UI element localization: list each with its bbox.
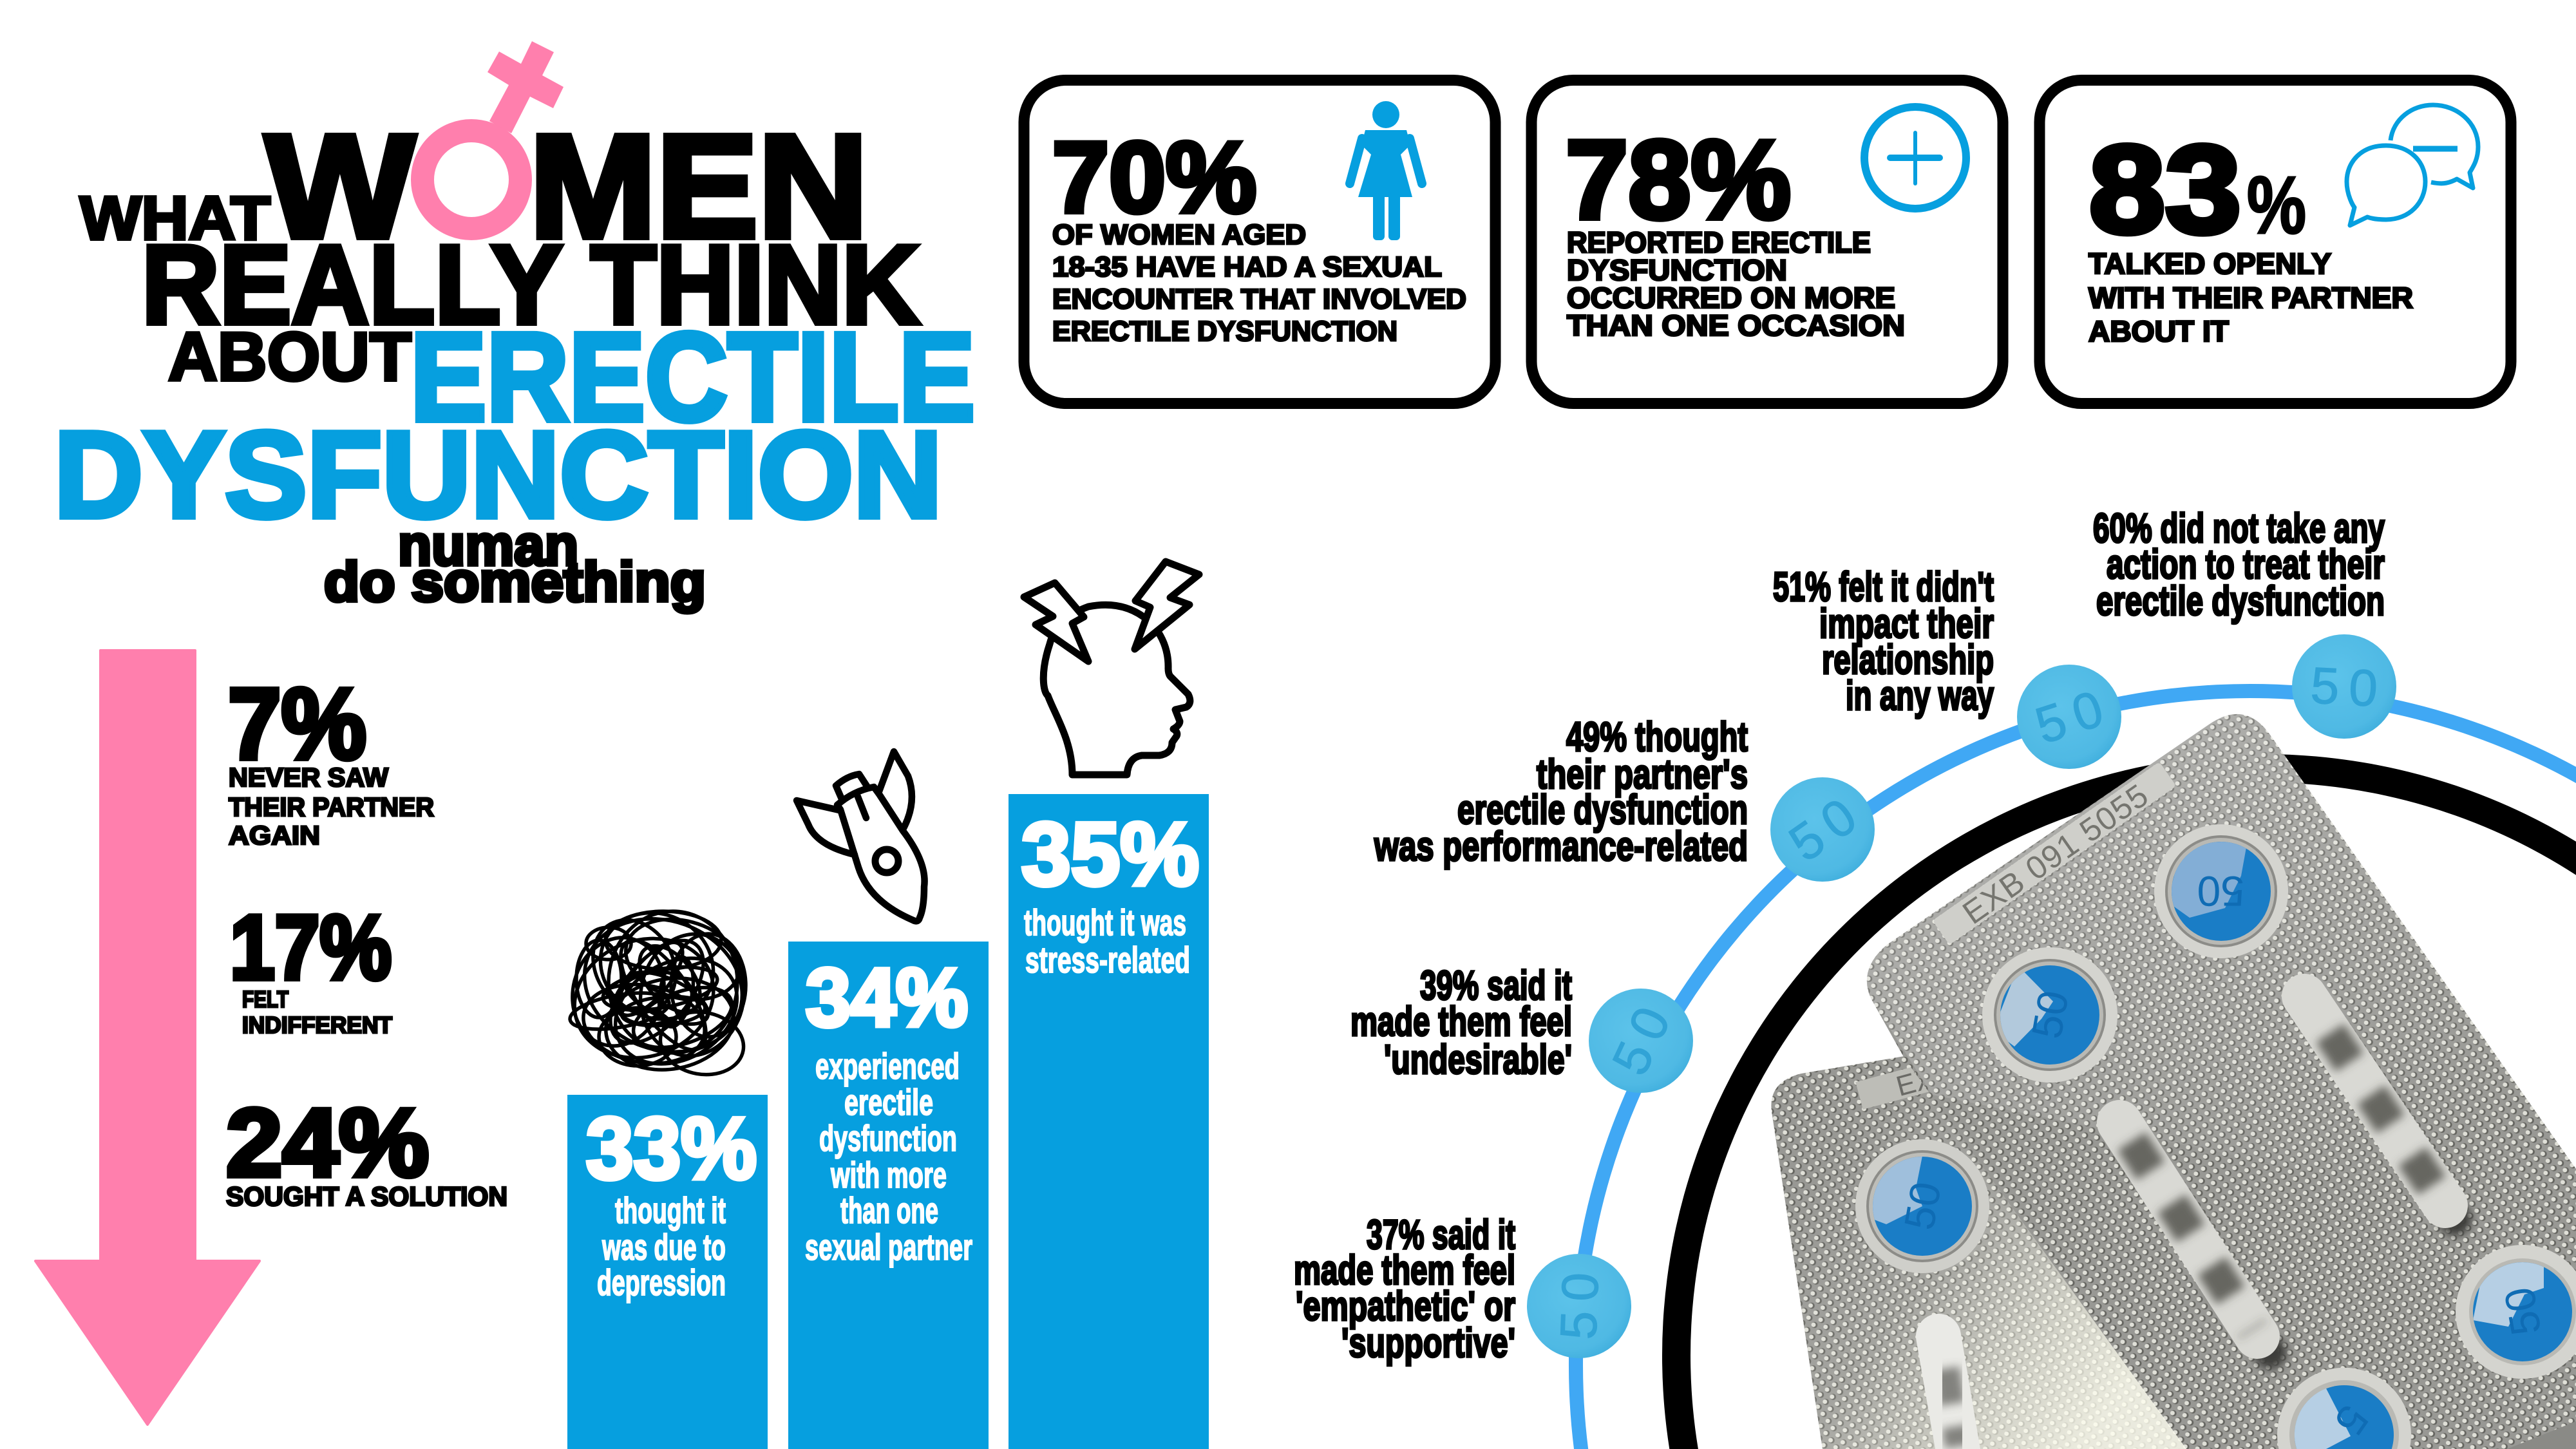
- stat: 24 percent sought a solution: [226, 1088, 507, 1211]
- callout: 37 percent empathetic: 'supportive': [1341, 1320, 1515, 1366]
- text: reported erectile dysfunction: THAN ONE OCCASION: [1567, 309, 1905, 342]
- text: reported erectile dysfunction: REPORTED ERECTILE: [1567, 226, 1871, 259]
- bar: 34 percent more than one partner: sexual partner: [805, 1227, 972, 1268]
- bar: 33 percent depression: 33%: [586, 1099, 757, 1197]
- callout: 51 percent no relationship impact: [1773, 564, 1994, 719]
- embossed corner strip: [2507, 1421, 2576, 1449]
- bar: 33 percent depression: thought it: [615, 1190, 726, 1231]
- callout: 49 percent performance-related: their partner's: [1537, 751, 1748, 797]
- title: [54, 41, 975, 544]
- pill marker: 39 percent: 50: [1601, 998, 1681, 1083]
- callout: 51 percent no relationship impact: relationship: [1822, 636, 1994, 683]
- callout: 51 percent no relationship impact: 51% felt it didn't: [1773, 564, 1994, 610]
- text: talked openly: TALKED OPENLY: [2088, 247, 2331, 280]
- icon: head with lightning bolts: [1024, 562, 1199, 775]
- callout: 49 percent performance-related: erectile dysfunction: [1457, 786, 1748, 833]
- pill marker: 60 percent: [2292, 634, 2396, 739]
- tablet: 50: [2022, 987, 2078, 1042]
- embossed expiry strip: EXB 091 5055: [1956, 777, 2155, 931]
- callout: 51 percent no relationship impact: in any way: [1846, 672, 1994, 719]
- number: 83%: %: [2247, 160, 2306, 251]
- tablet: [1855, 1139, 1989, 1273]
- panel: 83 percent stat: [2040, 80, 2511, 403]
- number: 83%: 83: [2089, 120, 2241, 260]
- icon: female symbol as letter O: [422, 41, 564, 229]
- panel: 78 percent stat: [1531, 80, 2003, 403]
- embossed strip: EX: [1893, 1063, 1938, 1103]
- text: talked openly: WITH THEIR PARTNER: [2088, 281, 2413, 314]
- bar: 34 percent more than one partner: dysfunction: [819, 1118, 957, 1159]
- title word: women, W: W: [265, 105, 415, 269]
- icon: woman: [1350, 101, 1422, 240]
- stat: 7 percent never saw partner again: THEIR PARTNER: [229, 792, 434, 822]
- callout: 37 percent empathetic: 'empathetic' or: [1296, 1283, 1515, 1329]
- tablet: [1982, 947, 2117, 1083]
- callout: 37 percent empathetic: 37% said it: [1367, 1211, 1515, 1258]
- callout: 37 percent empathetic: [1294, 1211, 1515, 1366]
- icon: rocket: [797, 752, 925, 921]
- text: reported erectile dysfunction: [1567, 226, 1905, 342]
- text: talked openly: [2088, 247, 2413, 348]
- callout: 37 percent empathetic: made them feel: [1294, 1247, 1515, 1293]
- logo: numan do something: [324, 513, 706, 613]
- stat: 24 percent sought a solution: 24%: [226, 1088, 429, 1197]
- embossed expiry strip: [1931, 760, 2179, 949]
- pill marker: 51 percent: 50: [2029, 679, 2110, 755]
- tablet: 50: [1895, 1179, 1950, 1233]
- pill marker: 51 percent: [2017, 665, 2121, 769]
- icon: plus in circle: [1864, 107, 1966, 209]
- icon: speech bubbles: [2347, 105, 2478, 225]
- pill marker: 49 percent: 50: [1779, 787, 1866, 873]
- blister pack: back: [1867, 714, 2576, 1449]
- stat: 17 percent felt indifferent: [230, 896, 392, 1038]
- callout: 60 percent no action: [2093, 505, 2385, 624]
- callout: 51 percent no relationship impact: impact their: [1819, 600, 1994, 647]
- callout: 39 percent undesirable: made them feel: [1350, 998, 1572, 1045]
- text: women aged 18-35: ENCOUNTER THAT INVOLVED: [1052, 283, 1466, 315]
- stat: 17 percent felt indifferent: 17%: [230, 896, 392, 999]
- arrow: downward pink arrow: [35, 650, 260, 1425]
- pill marker: 37 percent: 50: [1549, 1271, 1609, 1341]
- stat: 7 percent never saw partner again: NEVER SAW: [229, 762, 388, 792]
- bar: 35 percent stress-related: thought it was: [1024, 902, 1186, 943]
- bar: 34 percent more than one partner: experienced: [815, 1046, 960, 1087]
- logo: numan do something: do something: [324, 551, 706, 613]
- stat: 17 percent felt indifferent: FELT: [242, 986, 289, 1012]
- text: women aged 18-35: ERECTILE DYSFUNCTION: [1052, 316, 1397, 347]
- callout: 39 percent undesirable: 39% said it: [1420, 962, 1572, 1009]
- empty capsule: [2119, 1122, 2287, 1369]
- tablet: 50: [2495, 1284, 2550, 1339]
- black ring: [1662, 754, 2576, 1449]
- callout: 49 percent performance-related: 49% thought: [1566, 714, 1748, 760]
- title line: about: ABOUT: [168, 318, 412, 395]
- bar: 33 percent depression: depression: [597, 1262, 726, 1303]
- tablet: 5: [2325, 1397, 2378, 1444]
- text: women aged 18-35: [1052, 219, 1466, 347]
- text: women aged 18-35: OF WOMEN AGED: [1052, 219, 1306, 251]
- bar: 35 percent stress-related: [1009, 794, 1209, 1449]
- callout: 60 percent no action: 60% did not take any: [2093, 505, 2385, 551]
- stat: 7 percent never saw partner again: AGAIN: [229, 820, 320, 850]
- icon: tangled scribble: [558, 893, 761, 1085]
- stat: 24 percent sought a solution: SOUGHT A SOLUTION: [226, 1181, 507, 1211]
- panel: 70 percent stat: [1024, 80, 1495, 403]
- pill marker: 37 percent: [1527, 1254, 1631, 1358]
- callout: 49 percent performance-related: [1374, 714, 1748, 869]
- bar: 33 percent depression: [567, 1095, 768, 1449]
- tablet: [2277, 1368, 2411, 1449]
- bar: 34 percent more than one partner: erectile: [844, 1082, 933, 1123]
- bar: 35 percent stress-related: 35%: [1021, 804, 1199, 904]
- bar: 34 percent more than one partner: [788, 942, 989, 1449]
- tablet: [2154, 824, 2288, 958]
- empty capsule: [2304, 996, 2472, 1236]
- callout: 39 percent undesirable: [1350, 962, 1572, 1083]
- bar: 35 percent stress-related: stress-related: [1025, 940, 1190, 981]
- pill marker: 49 percent: [1770, 777, 1875, 882]
- tablet: 50: [2197, 867, 2244, 915]
- title word: women, MEN: MEN: [529, 105, 868, 269]
- bar: 34 percent more than one partner: with more: [830, 1155, 947, 1196]
- stat: 7 percent never saw partner again: 7%: [228, 668, 366, 781]
- text: women aged 18-35: 18-35 HAVE HAD A SEXUAL: [1052, 251, 1442, 283]
- blue arc: [1569, 684, 2576, 1449]
- callout: 60 percent no action: erectile dysfunction: [2096, 578, 2385, 624]
- logo: numan do something: numan: [398, 513, 578, 577]
- stat: 17 percent felt indifferent: INDIFFERENT: [242, 1012, 392, 1038]
- pill marker: 60 percent: 50: [2309, 656, 2379, 717]
- title line: erectile: ERECTILE: [410, 307, 975, 447]
- bar: 33 percent depression: was due to: [601, 1227, 726, 1268]
- title line: dysfunction: DYSFUNCTION: [54, 407, 942, 544]
- embossed strip: [1855, 1062, 1938, 1113]
- text: reported erectile dysfunction: OCCURRED ON MORE: [1567, 281, 1895, 314]
- number: 83%: [2089, 120, 2306, 260]
- empty capsule: [1916, 1314, 1980, 1449]
- bar: 34 percent more than one partner: 34%: [806, 952, 968, 1044]
- tablet: [2456, 1245, 2576, 1379]
- text: reported erectile dysfunction: DYSFUNCTION: [1567, 254, 1787, 287]
- bar: 34 percent more than one partner: than one: [840, 1190, 938, 1231]
- callout: 60 percent no action: action to treat their: [2107, 541, 2385, 587]
- number: 70%: 70%: [1052, 122, 1256, 234]
- title line: what: WHAT: [80, 184, 270, 252]
- title line: really think: REALLY THINK: [142, 222, 920, 347]
- blister pack: front: [1771, 1056, 2186, 1449]
- stat: 7 percent never saw partner again: [228, 668, 434, 850]
- text: talked openly: ABOUT IT: [2088, 315, 2229, 348]
- callout: 39 percent undesirable: 'undesirable': [1384, 1036, 1572, 1083]
- number: 78%: 78%: [1566, 117, 1791, 242]
- callout: 49 percent performance-related: was performance-related: [1374, 823, 1748, 869]
- pill marker: 39 percent: [1589, 989, 1693, 1093]
